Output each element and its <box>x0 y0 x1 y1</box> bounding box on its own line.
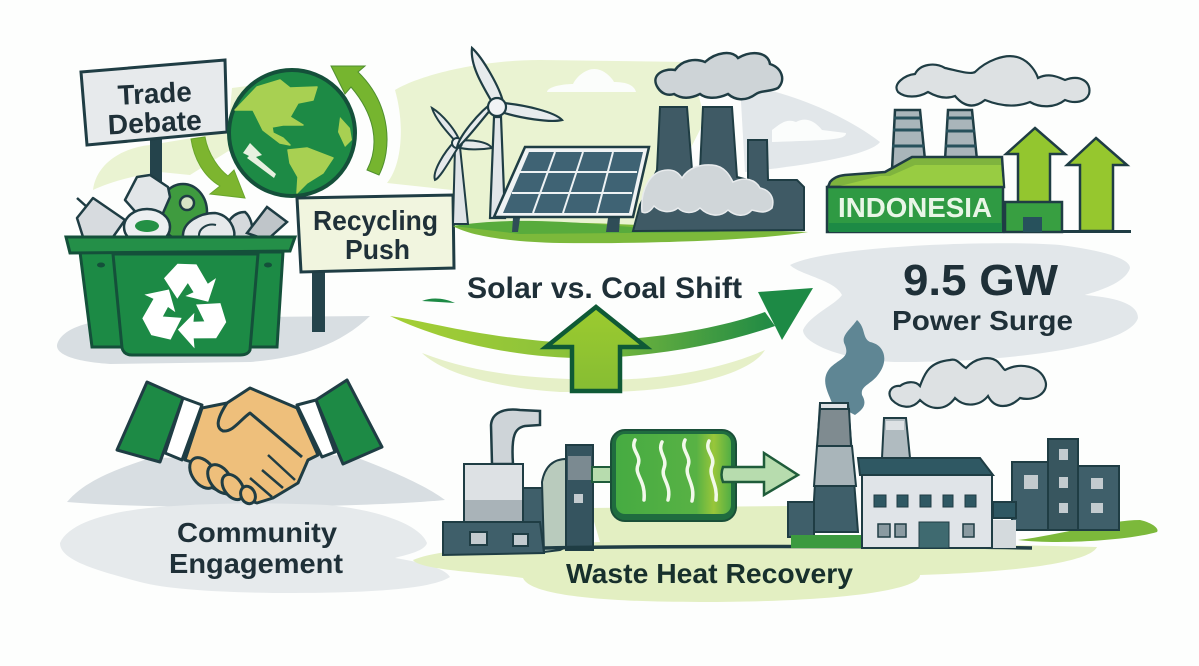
icon: growth arrow right <box>1067 138 1127 231</box>
icon: heat exchanger <box>611 430 736 521</box>
label: Community Engagement: Engagement <box>169 548 343 579</box>
white cloud on pale wash <box>547 69 636 92</box>
panel: solar vs coal scene <box>390 48 813 392</box>
icon: cloud above Indonesia plant <box>896 56 1089 106</box>
icon: globe <box>229 70 355 196</box>
label: Community Engagement: Community <box>177 517 337 548</box>
icon: small cloud right <box>890 358 1046 408</box>
sign: Trade Debate: Debate <box>107 105 202 140</box>
icon: large wind turbine <box>457 48 562 218</box>
icon: smoke <box>825 320 884 415</box>
panel: waste heat recovery <box>413 320 1158 602</box>
icon: smoke cloud above coal plant <box>655 53 782 99</box>
label: Power Surge: Power Surge <box>892 305 1073 336</box>
heading: Solar vs. Coal Shift: Solar vs. Coal Shift <box>467 272 742 305</box>
grey cloud label background <box>790 243 1138 362</box>
arrow: curved up around globe <box>331 66 387 175</box>
icon: handshake <box>117 380 382 506</box>
ground line <box>1062 230 1131 233</box>
light annex <box>992 520 1016 548</box>
green ground right <box>1018 520 1158 542</box>
input pipe <box>592 467 627 482</box>
recycling bin <box>66 237 295 355</box>
grey shadow upper <box>67 455 445 507</box>
sign: Trade Debate: Trade <box>117 76 192 111</box>
icon: striped cooling towers <box>892 110 977 170</box>
icon: recycling symbol <box>133 263 233 355</box>
arrow: curved green swoosh <box>390 312 775 358</box>
small green dash <box>422 299 455 303</box>
pale swoosh below arrow <box>422 350 765 392</box>
icon: small green building <box>1005 202 1062 232</box>
icon: solar panel <box>494 147 649 232</box>
trash pile <box>77 175 287 245</box>
sign: Recycling Push <box>297 195 454 272</box>
background: grey haze behind coal plant <box>740 84 880 172</box>
icon: right buildings <box>1012 439 1119 530</box>
arrowhead: swoosh tip <box>758 288 813 340</box>
label: Waste Heat Recovery: Waste Heat Recovery <box>566 558 853 589</box>
dark ground <box>453 221 720 234</box>
background: pale green wash behind signs <box>93 85 262 190</box>
small stack <box>882 418 910 458</box>
low block and green base <box>788 502 861 548</box>
icon: coal plant <box>633 107 804 231</box>
ground line <box>544 546 1032 548</box>
background: pale green wash behind energy scene <box>387 60 705 228</box>
arrow: curved down to bin <box>191 137 245 198</box>
panel: Indonesia power surge <box>790 56 1138 362</box>
icon: Indonesia factory <box>827 157 1004 232</box>
icon: growth arrow left <box>1006 128 1065 203</box>
arrow: output from heat exchanger <box>722 453 798 495</box>
sign: Trade Debate <box>81 60 227 145</box>
sign post: recycling push <box>312 270 325 332</box>
icon: left plant <box>443 410 593 555</box>
icon: small wind turbine <box>432 108 492 224</box>
factory label: INDONESIA: INDONESIA <box>838 192 992 223</box>
pale green ground <box>413 506 1097 602</box>
connector <box>993 502 1016 518</box>
sign: Recycling Push: Recycling <box>313 205 438 236</box>
sign post: trade debate <box>150 138 162 188</box>
panel: community engagement <box>60 380 450 593</box>
icon: chimney <box>812 403 858 532</box>
wavy heat lines <box>634 440 716 501</box>
panel: trade and recycling <box>57 60 454 364</box>
ground <box>453 222 808 243</box>
grey ellipse lower <box>60 503 450 593</box>
arrow: large up arrow <box>546 307 646 391</box>
bin shadow <box>57 316 370 364</box>
stat: 9.5 GW: 9.5 GW <box>903 256 1058 305</box>
sign: Recycling Push: Push <box>345 234 410 265</box>
label: Community Engagement <box>169 517 343 579</box>
icon: main factory building <box>858 458 993 548</box>
